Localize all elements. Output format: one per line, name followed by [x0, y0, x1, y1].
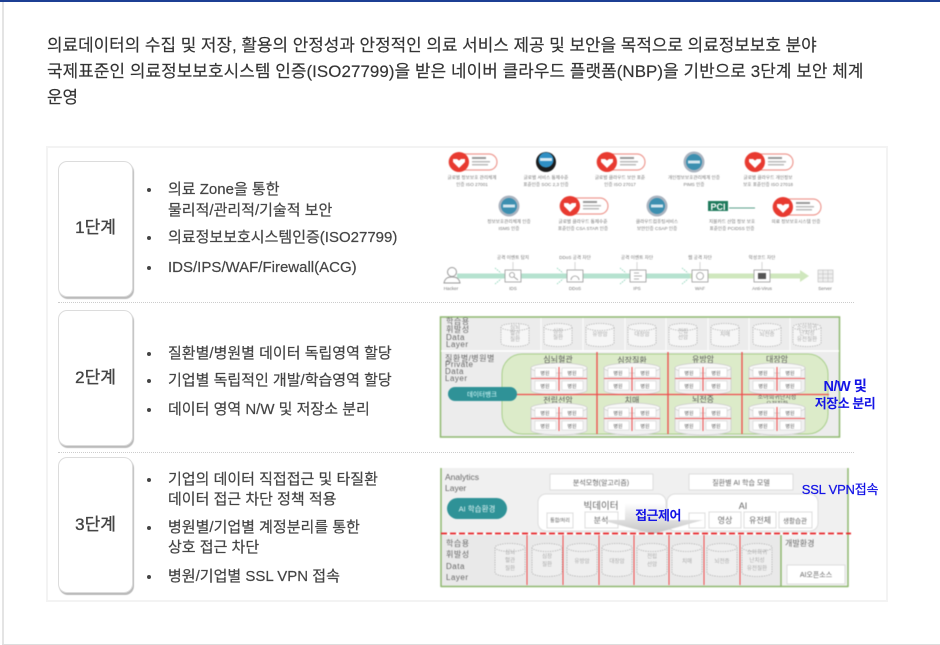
hospital storage groups: 병원: [758, 423, 768, 430]
badge row 1: PIMS 인증: [684, 181, 704, 187]
big data box: [538, 494, 666, 531]
badge row 1: 글로벌 서비스 통제수준: [524, 174, 568, 181]
volatile cylinders: 소아희귀: [747, 548, 767, 556]
hospital storage groups: 병원: [785, 423, 795, 430]
security flow diagram: 악성코드 차단: [749, 254, 776, 261]
disease titles: 심뇌혈관: [543, 354, 573, 364]
security flow diagram: Anti-Virus: [752, 286, 773, 291]
hospital storage groups: 병원: [540, 423, 550, 430]
hospital storage groups: 병원: [711, 383, 721, 390]
hospital storage groups: 병원: [785, 410, 795, 417]
volatile layer label: 학습용: [446, 538, 470, 548]
volatile data cylinders: 대장암: [634, 330, 650, 338]
hospital storage groups: 병원: [640, 383, 650, 390]
security flow diagram: IPS: [633, 286, 641, 291]
step 3 list: 상호 접근 차단: [168, 539, 259, 556]
badge row 1: 인증 ISO 27001: [456, 181, 488, 187]
step 2 label: 2단계: [75, 368, 116, 387]
step 1 list: [147, 181, 397, 276]
disease titles: 심장질환: [617, 355, 647, 365]
page bottom border: [2, 644, 940, 645]
disease titles: 질환: [551, 361, 566, 371]
disease titles: 유방암: [692, 354, 715, 364]
step 3 list: [147, 471, 378, 585]
security flow diagram: 공격 이벤트 차단: [621, 254, 654, 261]
label: network and storage separation: N/W 및: [823, 378, 867, 395]
label: network and storage separation: 저장소 분리: [815, 396, 875, 411]
hospital storage groups: 병원: [785, 383, 795, 390]
step 1 list: 의료 Zone을 통한: [168, 181, 280, 198]
security flow diagram: DDoS: [569, 286, 581, 291]
volatile data cylinders: 전립: [678, 327, 688, 335]
volatile data cylinders: 치매: [720, 330, 730, 338]
badge row 1: 인증 ISO 27017: [604, 181, 636, 187]
step 1 list: 물리적/관리적/기술적 보안: [168, 202, 332, 219]
security flow diagram: WAF: [695, 286, 705, 291]
badge row 2: 글로벌 클라우드 통제수준: [558, 218, 608, 225]
security flow diagram: Hacker: [444, 286, 459, 291]
hospital storage groups: [531, 363, 805, 435]
development environment: 개발환경: [785, 538, 814, 548]
security flow diagram: DDoS 공격 차단: [559, 254, 592, 261]
step 1 list: IDS/IPS/WAF/Firewall(ACG): [168, 259, 357, 276]
volatile layer label: Data: [446, 562, 465, 571]
step 3 list: 병원별/기업별 계정분리를 통한: [168, 519, 360, 536]
volatile cylinders: 선암: [647, 560, 657, 568]
red vertical separators: [527, 535, 740, 585]
badge row 2: 의료 정보보호시스템 인증: [771, 218, 821, 225]
volatile cylinders: 유방암: [574, 557, 590, 565]
badge row 2: PCI: [710, 202, 726, 212]
hospital storage groups: 병원: [540, 410, 550, 417]
heading paragraph: 의료데이터의 수집 및 저장, 활용의 안정성과 안정적인 의료 서비스 제공 및 보안을 목적으로 의료정보보호 분야: [47, 36, 817, 55]
volatile layer label: Layer: [446, 573, 469, 582]
disease titles: 뇌전증: [692, 394, 714, 404]
volatile cylinders: 치매: [682, 557, 692, 565]
heading paragraph: [47, 36, 863, 107]
badge row 2: 보안인증 CSAP 인증: [637, 225, 677, 231]
volatile data cylinders: 질환: [510, 335, 520, 343]
layer label: private data: Data: [445, 367, 464, 376]
hospital storage groups: 병원: [613, 383, 623, 390]
layer label: volatile data: 휘발성: [446, 324, 470, 334]
hospital storage groups: 병원: [640, 423, 650, 430]
big data box: 분석: [594, 515, 608, 525]
hospital storage groups: 병원: [711, 370, 721, 377]
volatile cylinders: 뇌전증: [714, 557, 730, 565]
step 3 label: 3단계: [75, 515, 116, 534]
badge row 1: 글로벌 클라우드 보안 표준: [595, 174, 645, 181]
AI box: 영상: [718, 515, 733, 525]
volatile data cylinders: 선암: [678, 333, 688, 341]
AI training pill: [447, 498, 507, 519]
model boxes: [550, 474, 793, 490]
disease titles: 치매: [625, 396, 639, 405]
heading paragraph: 국제표준인 의료정보보호시스템 인증(ISO27799)을 받은 네이버 클라우드 플랫폼(NBP)을 기반으로 3단계 보안 체계: [47, 62, 863, 81]
step 3 list: 데이터 접근 차단 정책 적용: [168, 491, 336, 508]
volatile cylinders: 유전질환: [747, 564, 767, 572]
layer label: volatile data: Layer: [446, 340, 469, 349]
volatile data cylinders: 소아희귀: [797, 323, 817, 331]
big data box: 통합/처리: [550, 517, 570, 524]
disease titles: 소아희귀난치성: [758, 393, 796, 401]
hospital storage groups: 병원: [540, 370, 550, 377]
hospital storage groups: 병원: [567, 370, 577, 377]
step 3 list: 병원/기업별 SSL VPN 접속: [168, 568, 340, 585]
disease titles: 전립선암: [543, 395, 573, 405]
badge row 2: [487, 196, 821, 231]
volatile cylinders: 심장: [542, 552, 552, 560]
badge row 2: 표준인증 CSA STAR 인증: [558, 225, 608, 231]
label: SSL VPN: SSL VPN접속: [802, 482, 879, 497]
volatile cylinders: 심뇌: [505, 548, 515, 556]
badge row 1: 글로벌 정보보호 관리체계: [447, 174, 497, 181]
volatile cylinders: 혈관: [505, 556, 515, 564]
page left border: [2, 2, 4, 645]
volatile data cylinders: 심장: [553, 327, 563, 335]
hospital storage groups: 병원: [567, 410, 577, 417]
layer label: private data: 질환별/병원별: [445, 353, 495, 363]
disease titles: [543, 354, 796, 408]
volatile cylinders: [495, 544, 772, 576]
top blue bar: [0, 0, 940, 2]
volatile data cylinders: [501, 323, 821, 346]
badge row 1: 보호 표준인증 ISO 27018: [743, 181, 793, 187]
security flow diagram: Server: [818, 286, 832, 291]
hospital storage groups: 병원: [758, 383, 768, 390]
badge row 2: 표준인증 PCIDSS 인증: [709, 225, 755, 231]
step 2 list: 질환별/병원별 데이터 독립영역 할당: [168, 345, 392, 362]
hacker icon: [444, 268, 460, 283]
hospital storage groups: 병원: [711, 410, 721, 417]
data bank pill: 데이터뱅크: [467, 390, 497, 398]
step 3 list: 기업의 데이터 직접접근 및 타질환: [168, 471, 378, 488]
security flow diagram: 공격 이벤트 탐지: [497, 254, 529, 261]
model boxes: 분석모형(알고리즘): [573, 478, 629, 487]
hospital storage groups: 병원: [613, 370, 623, 377]
hospital storage groups: 병원: [567, 423, 577, 430]
hospital storage groups: 병원: [758, 410, 768, 417]
green zone: [502, 354, 828, 434]
volatile data cylinders: 심뇌: [510, 323, 520, 331]
disease titles: 대장암: [766, 354, 789, 364]
hospital storage groups: 병원: [640, 410, 650, 417]
AI box: [667, 494, 818, 531]
step 3 label: [58, 457, 133, 593]
AI box: 생활습관: [783, 516, 807, 525]
layer label: volatile data: 학습용: [446, 316, 470, 326]
model boxes: 질환별 AI 학습 모델: [712, 478, 770, 487]
step 2 list: 기업별 독립적인 개발/학습영역 할당: [168, 372, 392, 389]
volatile cylinders: 난치성: [749, 556, 765, 564]
badge row 2: 지불카드 산업 정보 보호: [709, 218, 755, 225]
AI box: 유전체: [749, 515, 771, 525]
AI box: AI: [739, 501, 747, 511]
volatile cylinders: 대장암: [609, 557, 625, 565]
layer label: private data: Private: [445, 360, 473, 369]
hospital storage groups: 병원: [540, 383, 550, 390]
badge row 2: 클라우드컴퓨팅서비스: [636, 218, 678, 225]
badge row 2: ISMS 인증: [499, 225, 519, 231]
badge row 1: 표준인증 SOC 2,3 인증: [523, 181, 569, 187]
volatile data cylinders: 유전질환: [797, 335, 817, 343]
heading paragraph: 운영: [47, 88, 78, 107]
development environment: AI오픈소스: [800, 571, 833, 579]
hospital storage groups: 병원: [711, 423, 721, 430]
security flow diagram: 웹 공격 차단: [688, 254, 713, 261]
panel: step 2 data layer diagram: [440, 316, 840, 437]
volatile data cylinders: 유방암: [592, 330, 608, 338]
volatile data cylinders: 질환: [553, 333, 563, 341]
volatile layer label: 휘발성: [446, 549, 470, 559]
layer label: volatile data: Data: [446, 333, 465, 342]
flow nodes: [505, 270, 770, 282]
security flow diagram: [444, 254, 833, 291]
hospital storage groups: 병원: [684, 410, 694, 417]
hospital storage groups: 병원: [567, 383, 577, 390]
analytics layer label: Layer: [445, 483, 466, 493]
volatile cylinders: 질환: [505, 564, 515, 572]
server icon: [818, 270, 833, 282]
hospital storage groups: 병원: [613, 423, 623, 430]
volatile data cylinders: 혈관: [510, 329, 520, 337]
volatile data cylinders: 뇌전증: [759, 330, 775, 338]
red network separators: [513, 352, 829, 434]
layer label: private data: Layer: [445, 374, 468, 383]
access control arrow: [601, 503, 703, 534]
step 1 label: 1단계: [75, 218, 116, 237]
volatile cylinders: 전립: [647, 552, 657, 560]
step 2 list: 데이터 영역 N/W 및 저장소 분리: [168, 401, 370, 418]
development environment: [785, 538, 845, 584]
panel: certification badges: [447, 152, 821, 231]
badge row 1: 개인정보보호관리체계 인증: [668, 174, 720, 181]
security flow diagram: IDS: [509, 286, 517, 291]
hospital storage groups: 병원: [640, 370, 650, 377]
volatile cylinders: 질환: [542, 560, 552, 568]
disease titles: 유전질환: [766, 400, 789, 408]
panel: step 3 analytics diagram: [441, 468, 851, 587]
step 1 list: 의료정보보호시스템인증(ISO27799): [168, 229, 397, 246]
hospital storage groups: 병원: [684, 423, 694, 430]
AI training pill: AI 학습환경: [459, 504, 495, 514]
step 1 label: [58, 161, 133, 297]
hospital storage groups: 병원: [758, 370, 768, 377]
volatile data cylinders: 난치성: [799, 329, 815, 337]
badge row 1: 글로벌 클라우드 개인정보: [743, 174, 793, 181]
hospital storage groups: 병원: [613, 410, 623, 417]
hospital storage groups: 병원: [684, 383, 694, 390]
step 2 list: [147, 345, 392, 418]
red dashed boundary: [441, 532, 851, 534]
badge row 2: 정보보호관리체계 인증: [487, 218, 531, 225]
big data box: 빅데이터: [584, 501, 618, 512]
data bank pill: [448, 387, 517, 401]
hospital storage groups: 병원: [684, 370, 694, 377]
main panel: [46, 146, 888, 602]
step 2 label: [58, 310, 133, 446]
analytics layer label: Analytics: [445, 472, 479, 482]
hospital storage groups: 병원: [785, 370, 795, 377]
label: access control: 접근제어: [635, 508, 681, 523]
badge row 1: [447, 152, 793, 187]
